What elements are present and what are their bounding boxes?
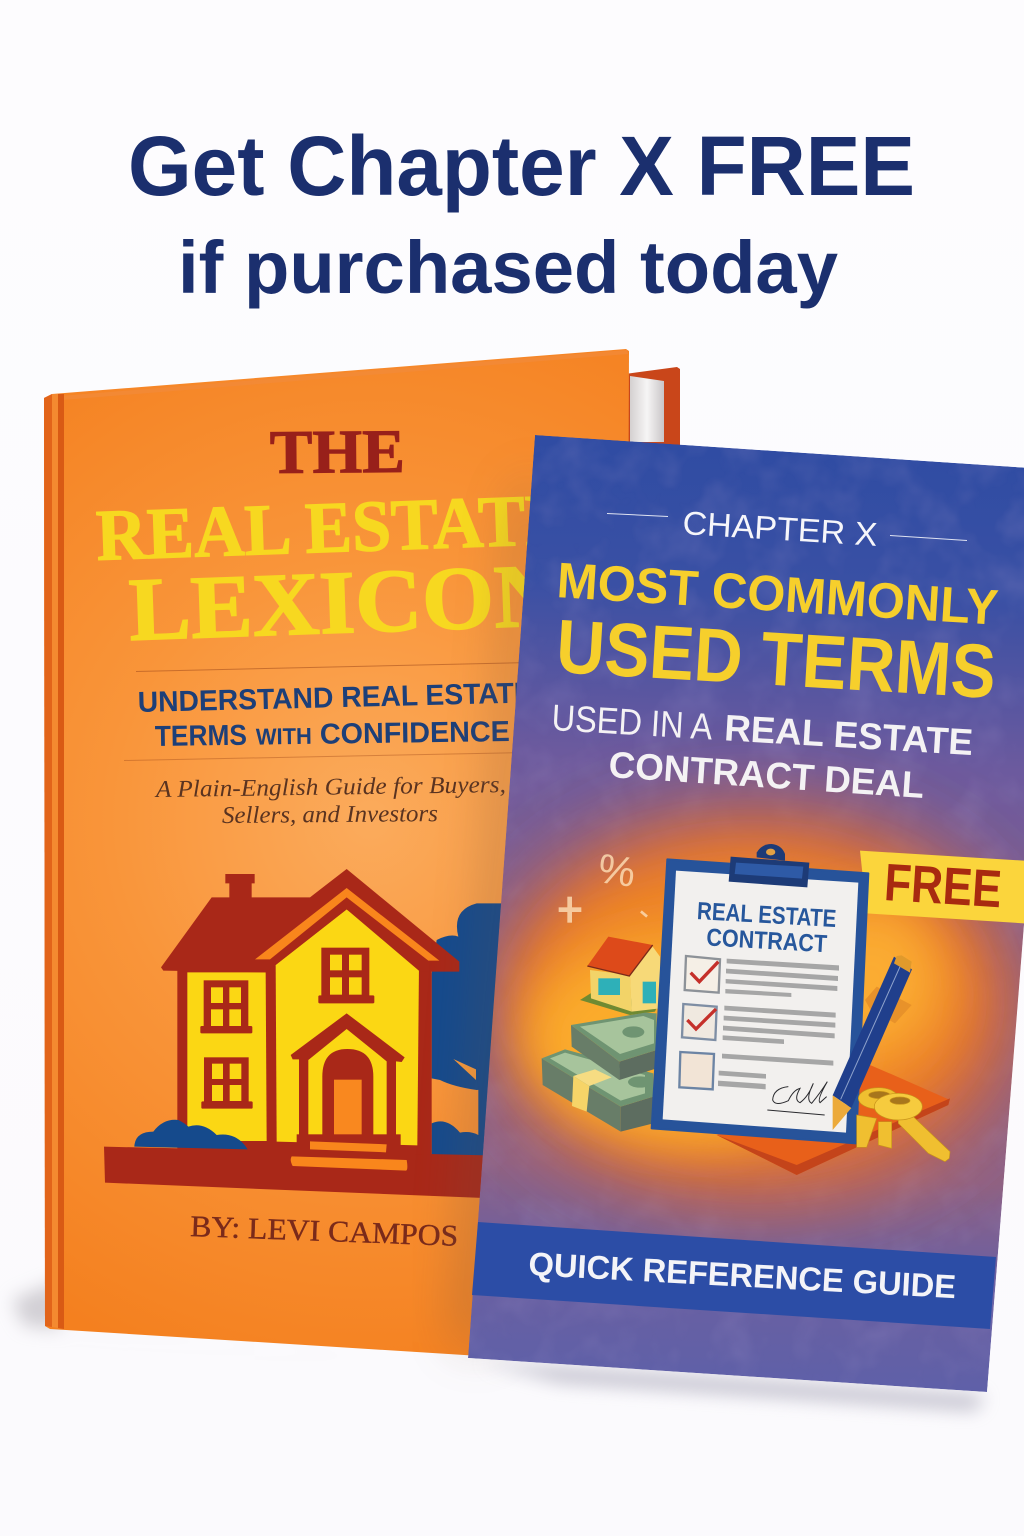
left window bottom <box>201 1057 253 1109</box>
booklet bottom shadow <box>480 1362 985 1410</box>
subheading line 1 <box>551 697 974 763</box>
book subtitle line 2: CONFIDENCE <box>320 716 510 751</box>
subheading line 1: REAL ESTATE <box>723 707 974 763</box>
signature <box>767 1082 827 1115</box>
ground <box>104 1147 517 1199</box>
porch <box>291 1013 407 1171</box>
book title: REAL ESTATE: REAL ESTATE <box>95 478 573 576</box>
title <box>128 119 915 309</box>
heading: most commonly: MOST COMMONLY <box>555 552 1000 636</box>
icon: house illustration <box>104 869 517 1199</box>
subheading line 2: CONTRACT DEAL <box>607 744 925 806</box>
roof trim <box>255 888 439 961</box>
booklet cover background <box>460 430 1024 1400</box>
icon: percent and plus <box>559 844 648 923</box>
book shadow <box>12 1280 400 1362</box>
contract heading: REAL ESTATE <box>696 898 837 933</box>
title: if purchased today <box>178 226 838 309</box>
bush left <box>134 1120 248 1149</box>
checklist item 3 <box>679 1052 833 1089</box>
book title: LEXICON: LEXICON <box>127 546 562 660</box>
book subtitle line 1: UNDERSTAND REAL ESTATE <box>137 677 533 719</box>
illustration: contract scene <box>542 844 1024 1175</box>
bottom stack <box>542 1058 621 1132</box>
booklet: chapter X <box>460 430 1024 1400</box>
icon: small house <box>580 937 660 1015</box>
checklist item 1 <box>685 956 839 997</box>
ribbon: quick reference guide <box>472 1222 996 1329</box>
book subtitle line 2: TERMS <box>155 720 247 753</box>
icon: pen <box>833 955 912 1130</box>
chapter heading <box>607 504 967 553</box>
book tagline <box>154 772 506 829</box>
bush right <box>432 1121 500 1156</box>
book author: BY: LEVI CAMPOS <box>190 1210 459 1253</box>
chapter heading: CHAPTER X <box>682 504 878 553</box>
icon: money stacks <box>542 1013 657 1132</box>
roof <box>161 869 459 972</box>
icon: percent and plus: % <box>595 844 638 896</box>
top stack <box>571 1025 619 1080</box>
book subtitle line 2: WITH <box>256 723 312 750</box>
top edge highlight <box>60 350 628 400</box>
book subtitle line 2 <box>155 716 510 753</box>
subheading line 1: USED IN A <box>551 697 714 748</box>
title: Get Chapter X FREE <box>128 119 915 213</box>
contract paper <box>663 871 858 1133</box>
icon: keys <box>857 1088 950 1162</box>
book: orange hardcover <box>44 349 680 1356</box>
icon: orange folder <box>717 1065 950 1175</box>
contract heading: CONTRACT <box>706 924 828 958</box>
back cover and pages <box>625 367 680 446</box>
booklet shadow <box>455 470 540 1350</box>
book tagline: A Plain-English Guide for Buyers, <box>154 772 506 803</box>
contract heading <box>696 898 837 958</box>
walls <box>177 903 432 1155</box>
upper window <box>318 948 374 1003</box>
rule <box>136 662 530 672</box>
left window top <box>200 980 252 1033</box>
front cover <box>44 349 629 1356</box>
book title: THE: THE <box>270 418 405 487</box>
book tagline: Sellers, and Investors <box>222 801 438 829</box>
rule <box>124 752 530 761</box>
ribbon: FREE: FREE <box>883 853 1003 919</box>
tree <box>432 903 517 1090</box>
money band <box>573 1069 612 1086</box>
ribbon: quick reference guide: QUICK REFERENCE GUIDE <box>528 1245 957 1305</box>
clip <box>729 844 809 887</box>
clipboard <box>652 844 868 1143</box>
spine hinge <box>44 394 64 1329</box>
checklist item 2 <box>682 1004 836 1044</box>
